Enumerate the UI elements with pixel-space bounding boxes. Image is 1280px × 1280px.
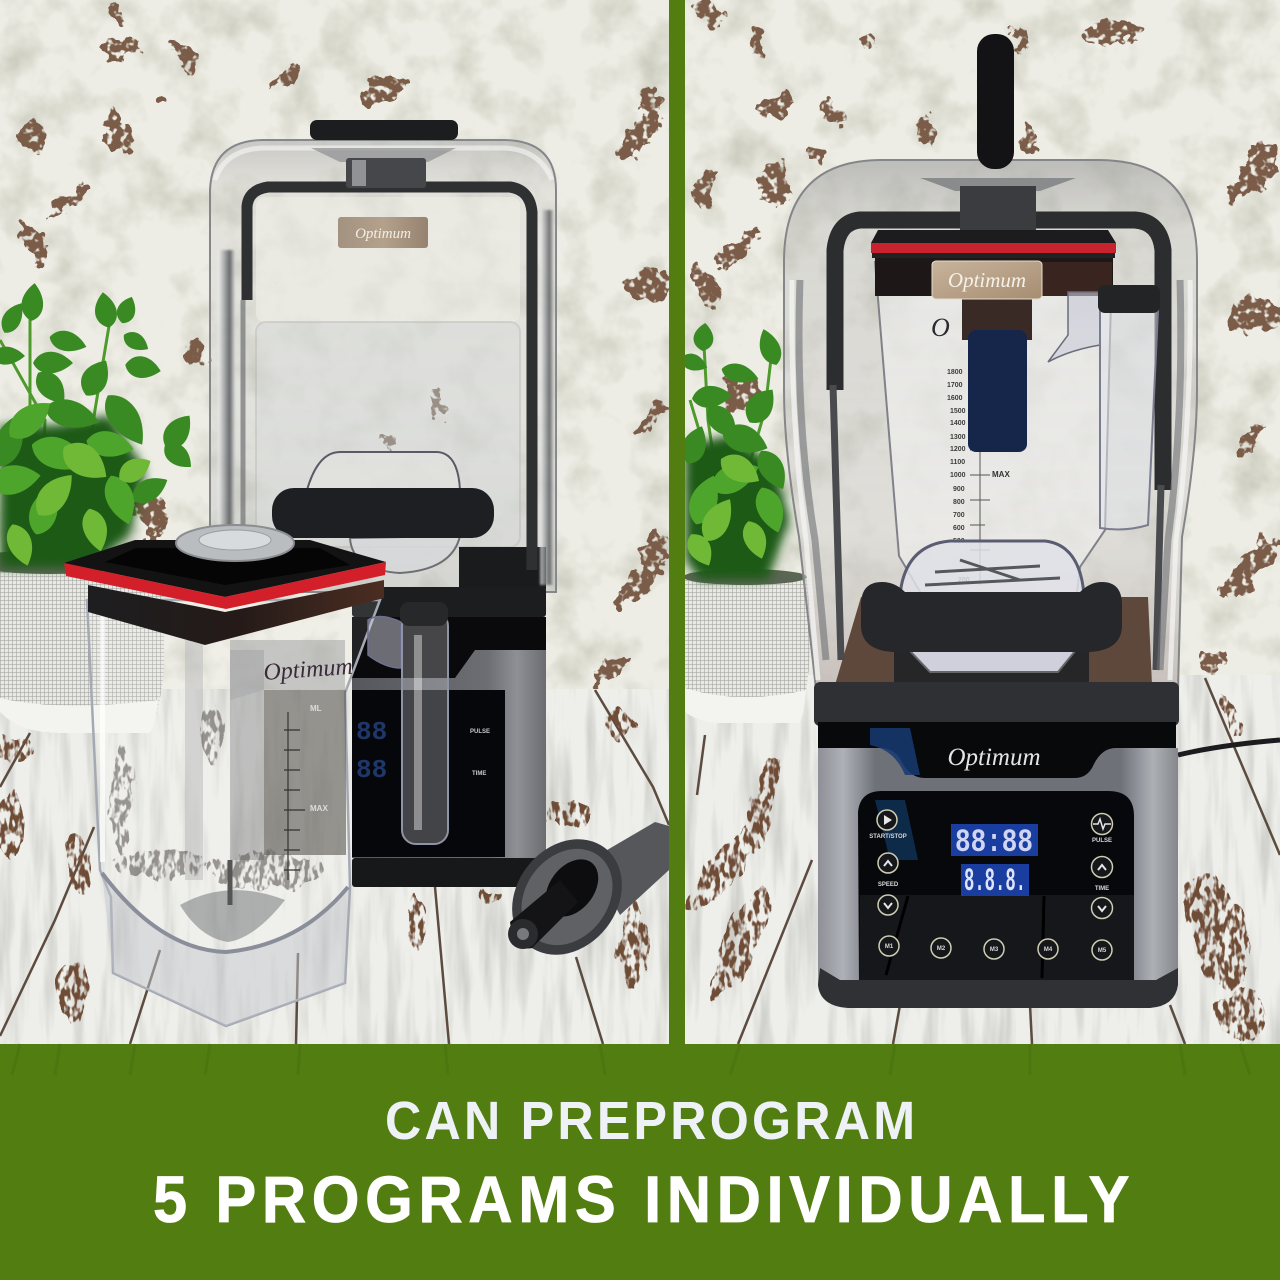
inner glass [256,197,520,322]
brand mark: Optimum [947,744,1041,771]
label: right jar [932,261,1042,299]
button labels: SPEED [878,882,899,888]
jar body [87,600,380,1026]
tamper shaft: right [920,34,1076,452]
power cord [1178,740,1280,755]
button labels: TIME [1095,886,1109,892]
rims [218,248,236,524]
jar: right: 900 [953,486,965,493]
wall: left [0,0,669,692]
jar: right: 1200 [950,446,966,453]
bottom foot [818,968,1178,1008]
collar: left base [272,452,494,573]
jar: left: ML [310,704,322,713]
heading line 2: 5 PROGRAMS INDIVIDUALLY [153,1162,1130,1236]
button labels: START/STOP [869,834,907,840]
heading line 1: CAN PREPROGRAM [385,1091,915,1151]
label: left shield [338,217,428,248]
jar: right: 1300 [950,434,966,441]
buttons [877,810,1112,960]
wall stains: right [690,0,1280,668]
banner plank shadow [12,1044,1250,1075]
plant stems [690,345,772,570]
base: left blender: TIME [472,771,486,777]
base: left blender: PULSE [470,729,490,735]
base top band [814,682,1179,726]
plant stems [0,319,110,433]
floor wear: left [0,707,646,1023]
panel: left photo [0,0,673,1044]
jar: right: MAX [992,470,1010,479]
base: left blender: 88 [356,755,387,785]
jar bottom [102,873,348,1026]
jar: left: Optimum [263,654,354,686]
button icons [884,819,1111,911]
frame [835,220,1163,490]
jar: right: 1100 [950,459,965,466]
shield: right blender [784,160,1197,689]
base steel body [818,748,1178,985]
jar: right: 600 [953,525,965,532]
frame [247,187,532,570]
jar: right: 500 [953,538,965,545]
floor planks: right [697,678,1280,1044]
base led digits: 88 [356,717,387,747]
icon: mint plant left [0,282,199,570]
jar: right: 1600 [947,395,963,402]
jar reflections [230,650,264,860]
base black band [818,722,1176,782]
jar: right: 800 [953,499,965,506]
banner: caption [0,1044,1280,1280]
divider [669,0,685,1044]
button labels: M1 [885,944,894,950]
floor planks: left [0,690,669,1044]
jar lid [875,254,1113,296]
jar: left: MAX [310,804,328,813]
blue reflection [870,728,920,775]
button labels: PULSE [1092,838,1112,844]
floor: right [685,675,1280,1044]
shield: left blender [210,140,556,592]
pot: left [0,550,164,733]
base well seen through shield [459,547,546,589]
jar: right: 1700 [947,382,963,389]
stains through shield [378,390,446,444]
jar: right: 200 [958,577,970,584]
floor through shield [835,597,1152,685]
floor wear: right [676,691,1264,1043]
label: right jar: Optimum [948,268,1026,292]
jar: right: 1500 [950,408,966,415]
handle: right jar [1048,285,1160,529]
tamper: left, lying down [508,822,669,955]
jar: right: 700 [953,512,965,519]
blade collar: right [861,541,1122,672]
pot: right [683,569,812,723]
button labels: M3 [990,947,999,953]
floor: left [0,689,669,1044]
handle: left jar [368,602,448,844]
jar: right: 1400 [950,420,966,427]
button labels: M4 [1044,947,1053,953]
jar: right: 1800 [947,369,963,376]
wall stains: left [15,6,673,688]
button labels: M5 [1098,948,1107,954]
base: left blender [352,587,546,887]
jar: right: 1000 [950,472,966,479]
label: left shield: Optimum [355,226,411,242]
jar: right [871,230,1116,600]
rims [799,280,826,660]
control panel [858,791,1134,982]
button labels: M2 [937,946,946,952]
display: speed: 8.8.8. [964,863,1026,900]
button labels [869,834,1112,954]
base: right blender [814,682,1179,1008]
plant mass [685,435,790,580]
plant mass [0,415,145,568]
jar inner clutter [109,705,320,888]
display: speed [961,863,1029,900]
jar lid: left [64,525,386,645]
lid: left shield [310,120,458,188]
icon: mint plant right [677,322,794,580]
display: time: 88:88 [955,824,1033,861]
panel: right photo [676,0,1280,1044]
jar: left [87,600,380,1026]
wall: right [685,0,1280,678]
jar: right: O [931,313,950,342]
